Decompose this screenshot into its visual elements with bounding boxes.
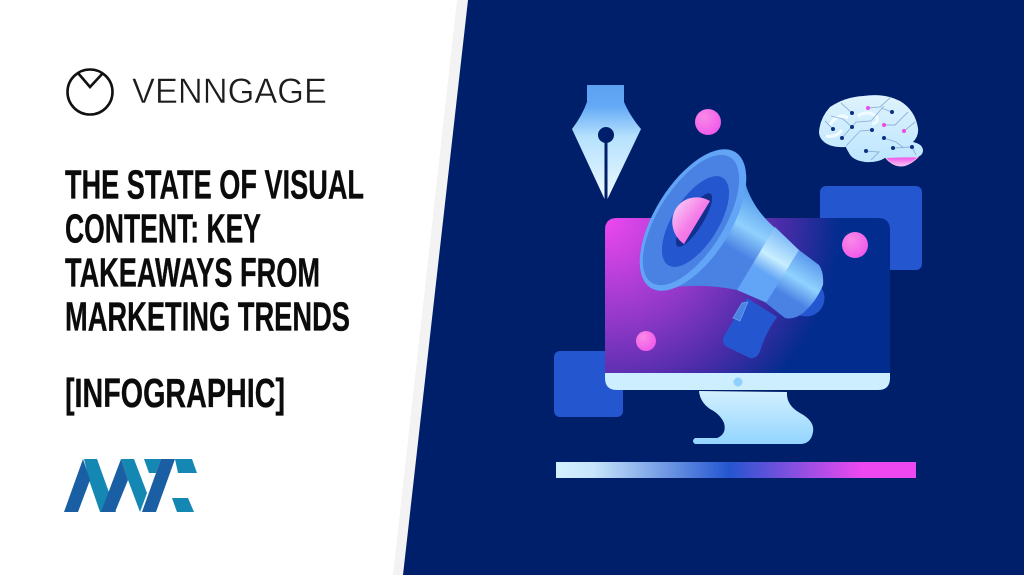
Venngage wordmark: VENNGAGE (132, 72, 327, 111)
monitor screen (605, 218, 890, 373)
title: CONTENT: KEY (65, 206, 261, 252)
icon: clock circle (68, 70, 112, 114)
gradient bar (556, 462, 916, 478)
Venngage logo (68, 70, 327, 114)
MT logo (64, 459, 197, 512)
pink dot on screen left (636, 331, 656, 351)
navy right panel (403, 0, 1024, 575)
blue square lower left (554, 351, 623, 417)
handle switch (733, 302, 748, 321)
power dot (734, 378, 742, 386)
title: MARKETING TRENDS (65, 294, 350, 340)
horn light band (737, 227, 800, 303)
back cap (788, 280, 824, 316)
mouth inner (649, 166, 742, 277)
icon: brain (819, 95, 923, 166)
monitor bezel (605, 373, 890, 390)
mouth rim (618, 132, 768, 308)
horn section near mouth (660, 182, 775, 290)
title: [INFOGRAPHIC] (65, 370, 285, 416)
pink dot on screen right (842, 232, 868, 258)
horn end section (766, 250, 823, 318)
light slanted band (393, 0, 468, 575)
mouth dark (670, 189, 718, 251)
title (65, 162, 364, 416)
mouth face (624, 140, 758, 300)
title: TAKEAWAYS FROM (65, 250, 320, 296)
monitor stand (693, 391, 813, 444)
pink dome (672, 197, 710, 244)
icon: pen nib (572, 85, 641, 200)
title: THE STATE OF VISUAL (65, 162, 364, 208)
pink dot top (695, 109, 721, 135)
blue square behind monitor (820, 186, 922, 270)
handle (723, 298, 777, 358)
megaphone (618, 132, 824, 358)
illustration: marketing scene (554, 85, 923, 478)
